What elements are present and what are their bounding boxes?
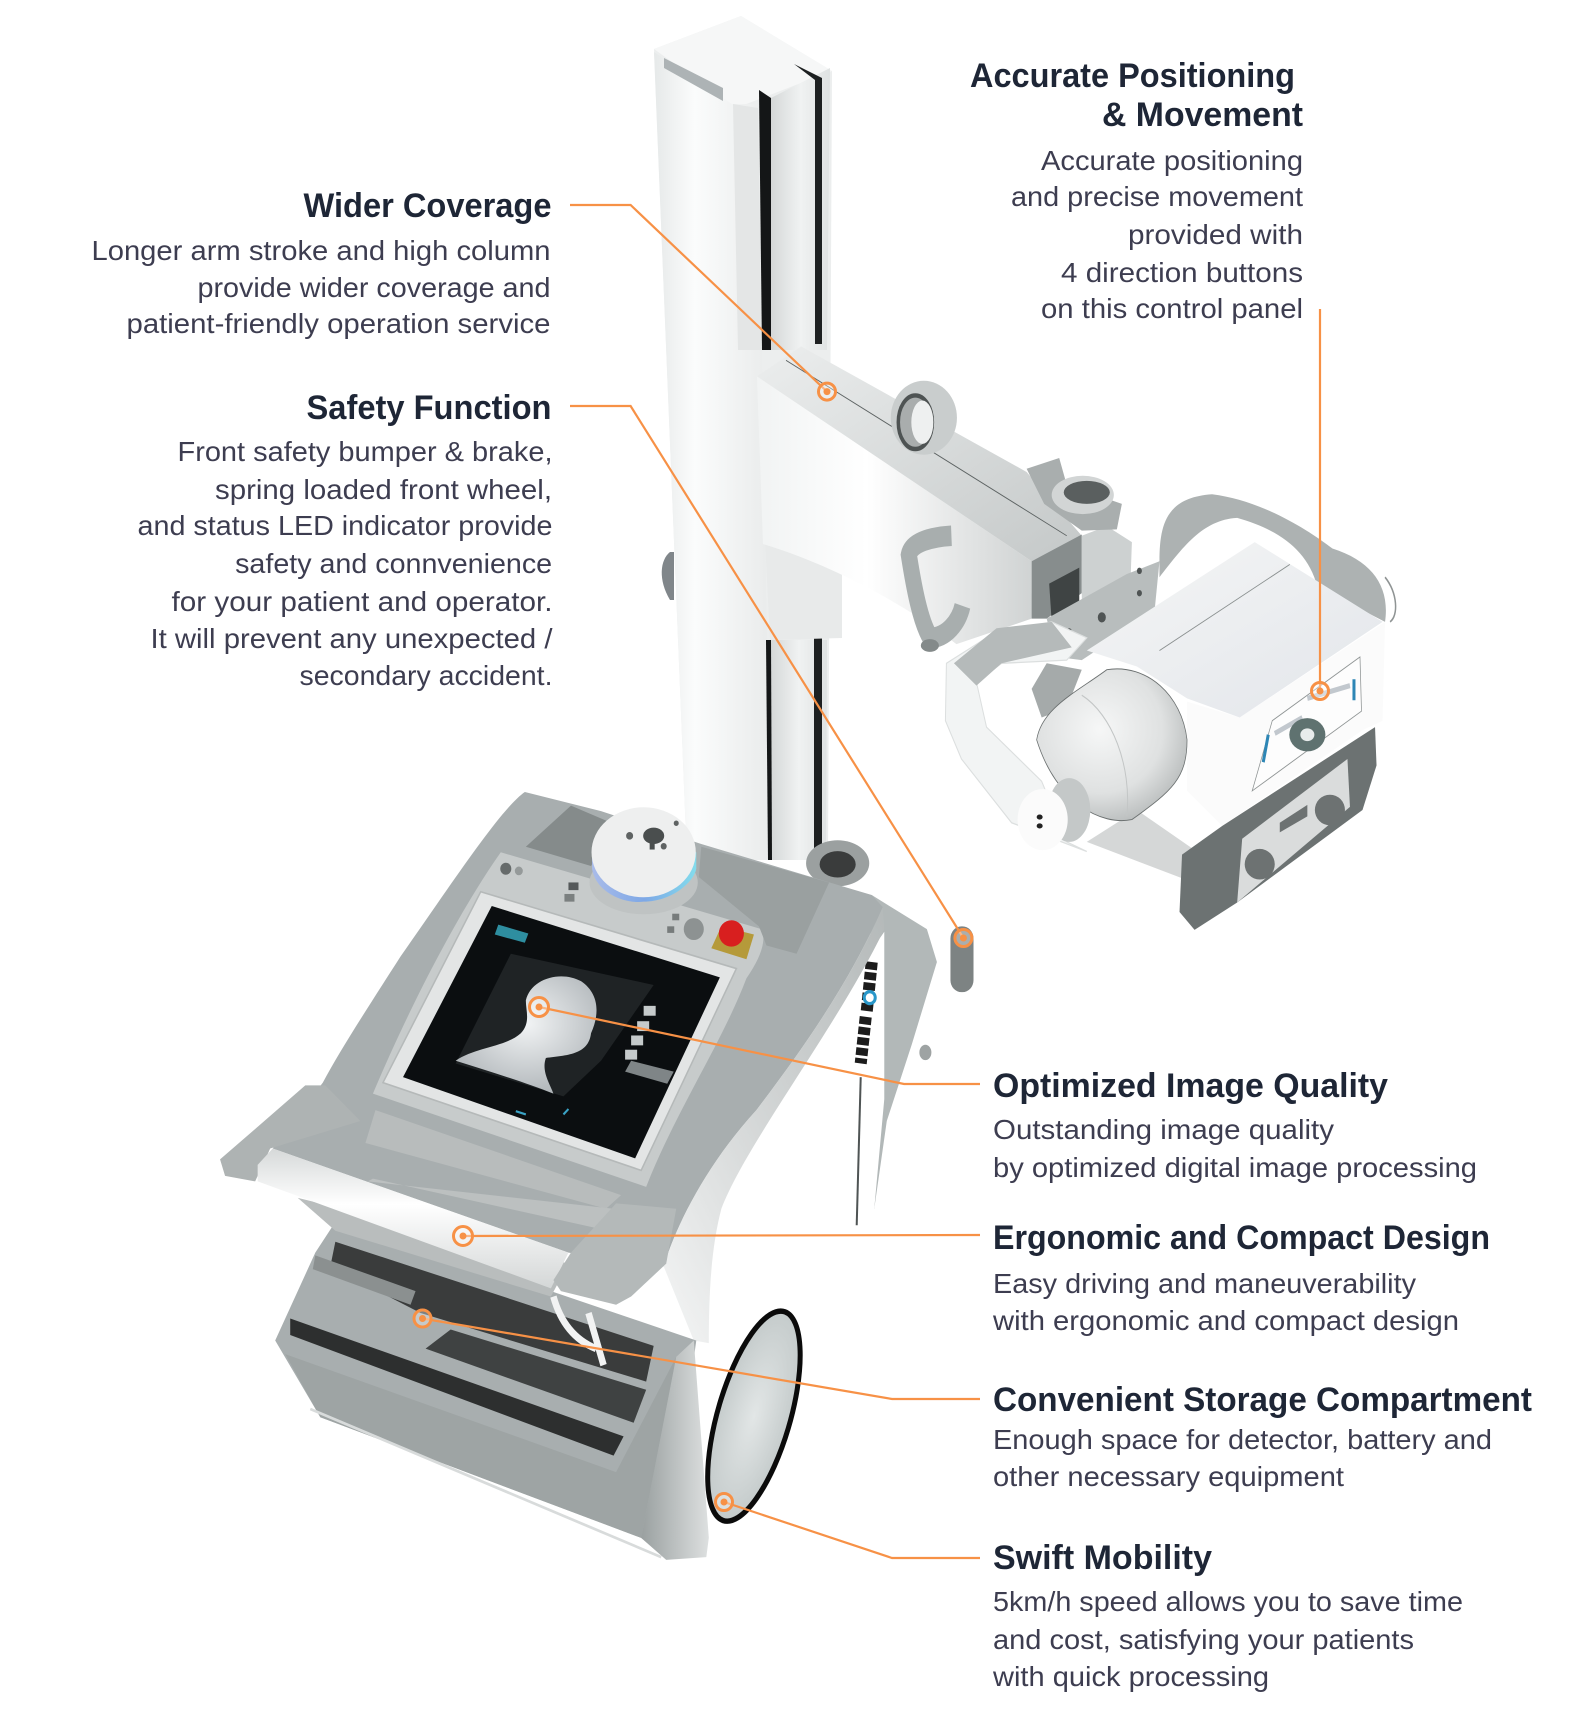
description: provide wider coverage and: [198, 272, 550, 303]
top console: [273, 792, 884, 1343]
text block: accurate positioning: [970, 57, 1303, 324]
ring holder one: [891, 381, 957, 455]
description: with ergonomic and compact design: [992, 1305, 1459, 1336]
text block: wider coverage: [92, 187, 552, 339]
description: Easy driving and maneuverability: [993, 1268, 1416, 1299]
front yoke strap: [945, 622, 1087, 851]
control panel buttons: [1252, 657, 1361, 791]
description: by optimized digital image processing: [993, 1152, 1477, 1183]
storage compartment: [275, 1214, 709, 1560]
text block: swift mobility: [992, 1539, 1463, 1692]
pillar holder ring: [806, 840, 869, 886]
x-ray machine column: [654, 16, 842, 860]
generator handle: [1087, 727, 1377, 930]
body logo: [857, 962, 875, 1225]
heading: Swift Mobility: [993, 1539, 1212, 1577]
hanging cable: [553, 1297, 604, 1365]
touch screen: [383, 892, 736, 1170]
description: It will prevent any unexpected /: [150, 623, 553, 654]
text block: safety function: [138, 389, 553, 691]
emergency stop and key switch: [667, 914, 754, 959]
description: Longer arm stroke and high column: [92, 235, 550, 266]
ring holder two: [1027, 458, 1122, 531]
x-ray skull: [456, 976, 597, 1094]
description: patient-friendly operation service: [126, 308, 550, 339]
leader: swift mobility: [716, 1494, 980, 1558]
heading: [970, 57, 1303, 134]
description: [993, 1424, 1492, 1492]
description: Enough space for detector, battery and: [993, 1424, 1492, 1455]
tube end cap: [1018, 778, 1090, 850]
leader: storage compartment: [414, 1310, 980, 1399]
description: on this control panel: [1041, 293, 1303, 324]
leader: safety function: [570, 406, 972, 946]
description: [1011, 145, 1303, 324]
description: [138, 436, 553, 691]
text block: ergonomic design: [992, 1219, 1490, 1336]
heading: Safety Function: [306, 389, 552, 427]
heading: Wider Coverage: [304, 187, 552, 225]
led status puck: [590, 807, 698, 914]
description: [993, 1114, 1477, 1183]
leader: optimized image quality: [530, 998, 980, 1084]
description: secondary accident.: [300, 660, 552, 691]
arm body: [757, 346, 1159, 660]
description: for your patient and operator.: [172, 586, 552, 617]
mobile cart base: [220, 792, 974, 1560]
description: and status LED indicator provide: [138, 510, 552, 541]
white body side: [706, 932, 884, 1527]
heading: Ergonomic and Compact Design: [993, 1219, 1490, 1257]
tube neck: [1032, 663, 1082, 718]
description: Accurate positioning: [1041, 145, 1303, 176]
rear yoke strap: [1159, 494, 1386, 622]
heading: Optimized Image Quality: [993, 1067, 1388, 1105]
rear side panel: [862, 895, 974, 1209]
description: other necessary equipment: [993, 1461, 1344, 1492]
x-ray arm and tube head: [757, 346, 1396, 930]
tube housing: [1087, 542, 1396, 826]
description: 4 direction buttons: [1061, 257, 1303, 288]
description: [92, 235, 550, 339]
arm handle: [909, 536, 962, 652]
description: Front safety bumper & brake,: [178, 436, 552, 467]
description: safety and connvenience: [235, 548, 552, 579]
leader: wider coverage: [570, 205, 836, 400]
heading: & Movement: [1102, 96, 1303, 134]
wheel: [689, 1300, 819, 1533]
description: spring loaded front wheel,: [215, 474, 552, 505]
description: 5km/h speed allows you to save time: [993, 1586, 1463, 1617]
description: Outstanding image quality: [993, 1114, 1334, 1145]
description: and precise movement: [1011, 181, 1303, 212]
heading: Convenient Storage Compartment: [993, 1381, 1532, 1419]
description: [992, 1586, 1463, 1692]
callout leaders and markers: [414, 205, 1328, 1558]
tube cylinder: [1037, 669, 1187, 821]
text block: optimized image quality: [993, 1067, 1477, 1183]
text block: storage compartment: [993, 1381, 1532, 1492]
description: with quick processing: [992, 1661, 1269, 1692]
leader: ergonomic design: [454, 1226, 980, 1246]
description: provided with: [1128, 219, 1303, 250]
heading: Accurate Positioning: [970, 57, 1295, 95]
description: and cost, satisfying your patients: [993, 1624, 1414, 1655]
leader: accurate positioning: [1312, 309, 1328, 700]
description: [992, 1268, 1459, 1336]
handle bar: [220, 1085, 676, 1305]
